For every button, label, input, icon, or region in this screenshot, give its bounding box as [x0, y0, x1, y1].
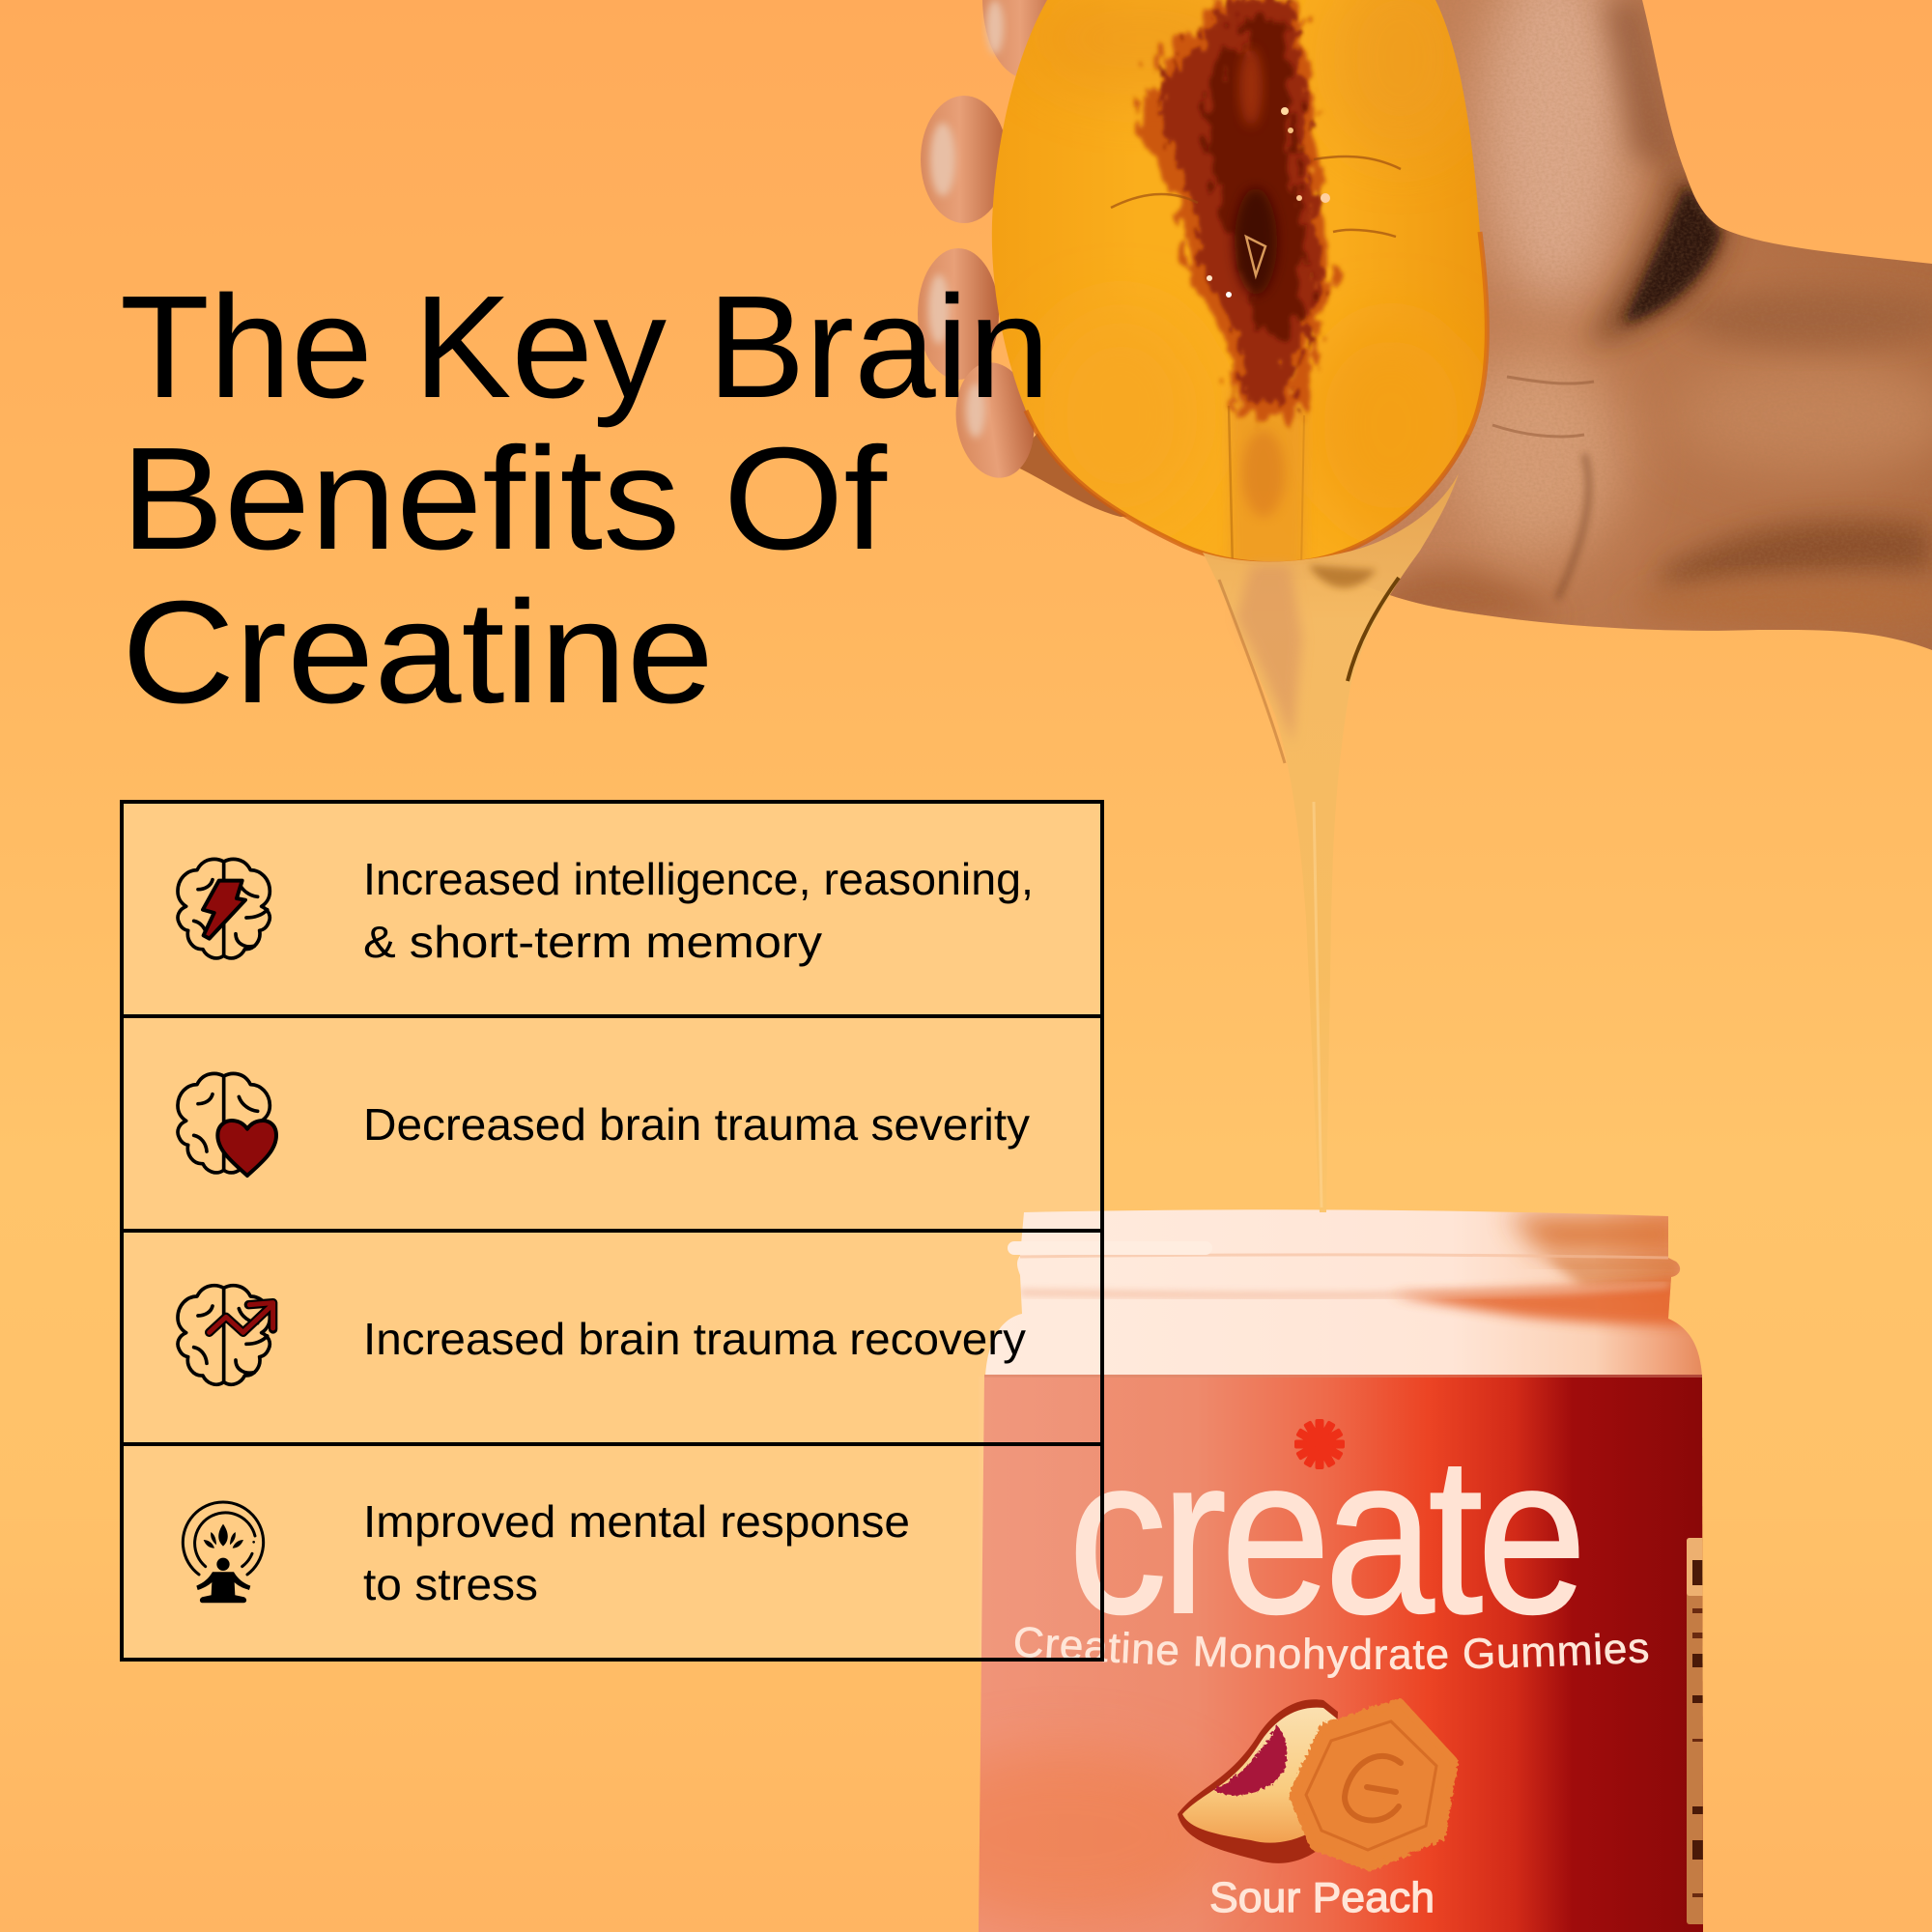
benefit text: to stress — [363, 1559, 538, 1609]
jar label — [979, 1375, 1703, 1932]
peach half — [992, 0, 1487, 572]
hexagonal gummy — [1293, 1702, 1455, 1867]
panel: table background — [122, 802, 1102, 1660]
product name: Creatine Monohydrate Gummies — [1014, 1627, 1648, 1678]
panel highlight over jar label — [979, 1377, 1102, 1660]
benefit text: Increased intelligence, reasoning, — [363, 854, 1034, 904]
row 2: trauma severity — [178, 1073, 1031, 1176]
asterisk logo mark — [1294, 1419, 1345, 1469]
benefit text — [363, 1496, 910, 1609]
icon: brain with rising arrow — [178, 1286, 273, 1384]
lower crease — [1229, 386, 1306, 572]
hand and arm — [918, 0, 1932, 657]
product jar — [979, 1209, 1703, 1932]
peach pit cavity — [1138, 0, 1338, 415]
icon: brain with heart — [178, 1073, 276, 1176]
benefit text: & short-term memory — [363, 917, 823, 967]
benefit text: Improved mental response — [363, 1496, 910, 1547]
table frame and row lines — [122, 802, 1102, 1660]
benefit text — [363, 854, 1034, 967]
palm and forearm — [1338, 0, 1932, 650]
dripping juice — [1203, 473, 1459, 1212]
jar cap — [985, 1209, 1702, 1377]
icon: brain with lightning bolt — [178, 859, 270, 958]
peach slice illustration — [1178, 1699, 1338, 1863]
icon: meditating figure — [183, 1502, 264, 1603]
row 1: intelligence — [178, 854, 1034, 967]
title: Creatine — [122, 570, 714, 733]
benefit text: Decreased brain trauma severity — [363, 1099, 1031, 1150]
fingers — [918, 0, 1198, 517]
create wordmark: create — [1068, 1410, 1580, 1661]
product name baseline curve — [1012, 1656, 1654, 1669]
radial fibres — [1111, 156, 1401, 237]
row 3: trauma recovery — [178, 1286, 1027, 1384]
panel: benefits table — [122, 802, 1102, 1660]
flavour name: Sour Peach — [1209, 1874, 1435, 1921]
title — [120, 265, 1050, 733]
nutrition panel strip — [1687, 1538, 1703, 1924]
title: Benefits Of — [121, 416, 888, 580]
row 4: stress response — [183, 1496, 910, 1609]
title: The Key Brain — [120, 265, 1050, 428]
benefit text: Increased brain trauma recovery — [363, 1314, 1027, 1364]
